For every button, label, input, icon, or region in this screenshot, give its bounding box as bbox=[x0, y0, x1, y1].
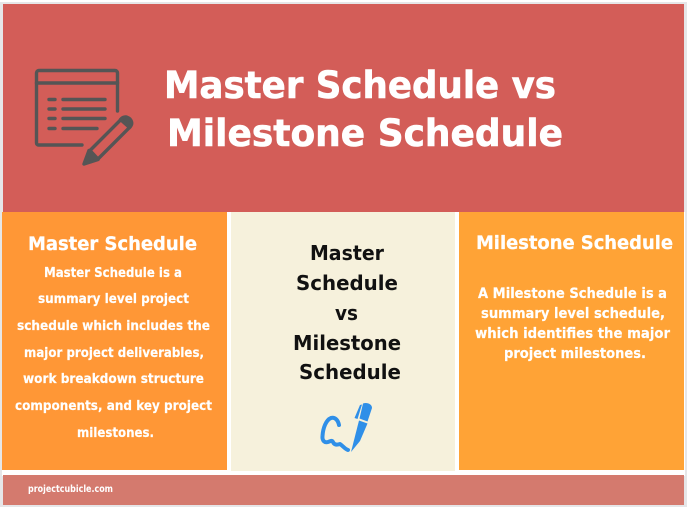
heading: master schedule vs milestone schedule: Schedule bbox=[296, 271, 398, 295]
heading: milestone schedule: Milestone Schedule bbox=[476, 232, 673, 254]
text block: master schedule definition: summary level project bbox=[38, 291, 189, 307]
heading: master schedule vs milestone schedule bbox=[293, 241, 401, 384]
text block: milestone schedule definition: project milestones. bbox=[504, 346, 646, 362]
panel: center comparison bbox=[231, 212, 455, 471]
text block: milestone schedule definition bbox=[475, 286, 670, 362]
title bbox=[164, 64, 563, 155]
heading: master schedule vs milestone schedule: vs bbox=[335, 301, 358, 325]
panel: header banner bbox=[3, 4, 684, 212]
text block: master schedule definition: work breakdown structure bbox=[23, 371, 204, 387]
text block: master schedule definition: components, and key project bbox=[15, 398, 212, 414]
heading: master schedule: Master Schedule bbox=[28, 233, 197, 255]
text block: master schedule definition: major project deliverables, bbox=[24, 345, 204, 361]
icon: schedule with pencil bbox=[36, 70, 132, 164]
heading: master schedule vs milestone schedule: Schedule bbox=[299, 360, 401, 384]
text block: master schedule definition: Master Schedule is a bbox=[44, 265, 182, 281]
text block: milestone schedule definition: A Milestone Schedule is a bbox=[478, 286, 667, 302]
title: Master Schedule vs bbox=[164, 64, 556, 107]
panel: footer bar bbox=[3, 475, 684, 505]
footer website: projectcubicle.com bbox=[28, 484, 113, 495]
text block: milestone schedule definition: which identifies the major bbox=[475, 326, 670, 342]
text block: master schedule definition bbox=[15, 265, 212, 441]
panel: milestone schedule bbox=[459, 212, 684, 470]
text block: master schedule definition: milestones. bbox=[77, 425, 154, 441]
icon: blue pen signature bbox=[322, 403, 372, 452]
heading: master schedule vs milestone schedule: Master bbox=[310, 241, 385, 265]
panel: master schedule bbox=[2, 212, 227, 470]
title: Milestone Schedule bbox=[167, 112, 563, 155]
text block: milestone schedule definition: summary level schedule, bbox=[481, 306, 665, 322]
heading: master schedule vs milestone schedule: Milestone bbox=[293, 331, 401, 355]
text block: master schedule definition: schedule which includes the bbox=[17, 318, 210, 334]
